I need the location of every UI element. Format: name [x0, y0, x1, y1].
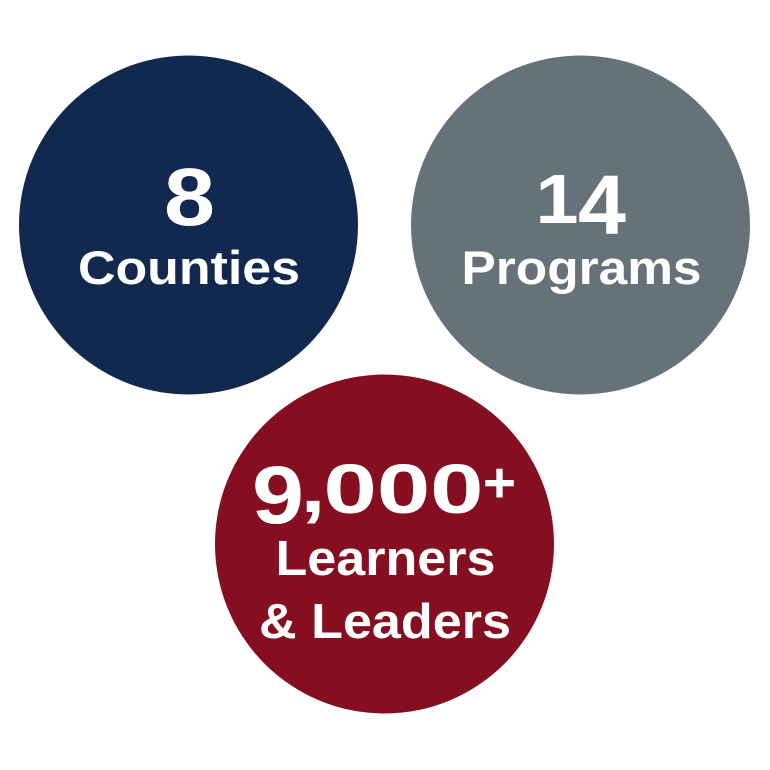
label: Learners: Learners [276, 532, 496, 586]
number: 14: 4 [578, 158, 626, 252]
number: 8: 8 [164, 152, 215, 243]
number: 9,000+: 000 [324, 450, 484, 528]
label: Programs: Programs [462, 241, 702, 294]
panel: programs circle [411, 56, 750, 394]
panel: learners and leaders circle [215, 374, 554, 714]
number: 9,000+: , [300, 445, 326, 528]
number: 9,000+: + [483, 451, 516, 515]
number: 14 [536, 158, 626, 252]
number: 9,000+: 9 [252, 450, 304, 541]
label: and Leaders: & Leaders [259, 595, 511, 649]
label: Counties: Counties [78, 241, 300, 294]
number: 9,000+ [252, 445, 516, 541]
panel: counties circle [19, 56, 358, 394]
number: 14: 1 [536, 160, 578, 238]
